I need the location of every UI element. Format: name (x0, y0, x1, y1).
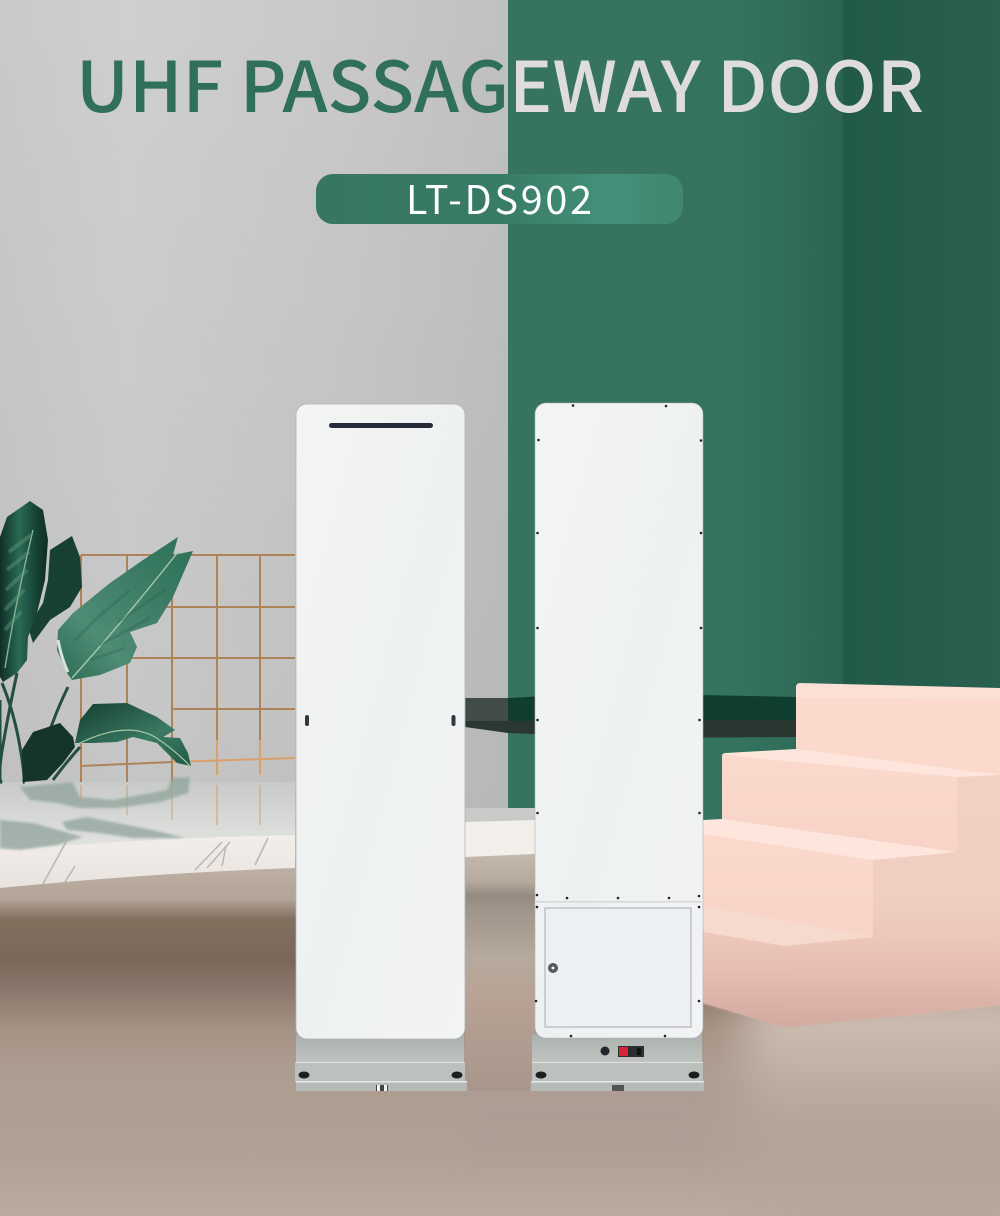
right door unit (531, 403, 704, 1091)
plant (0, 501, 193, 783)
second riser (722, 755, 957, 855)
plant reflection (0, 777, 190, 850)
model pill (316, 169, 683, 226)
left panel (296, 404, 465, 1039)
right side face (957, 775, 1000, 1010)
left base (295, 1035, 467, 1091)
background: dark green wall (843, 0, 1000, 700)
fourth side face (785, 930, 1000, 1027)
fourth step surface (703, 905, 873, 946)
third step surface (703, 819, 957, 860)
right base (531, 1034, 704, 1091)
model number: LT-DS902 (406, 169, 592, 226)
right panel (535, 403, 703, 1038)
fourth riser (703, 930, 785, 1027)
compartment seam (536, 901, 702, 902)
left sensor (305, 715, 309, 726)
third side face (873, 850, 957, 1018)
pill background (316, 174, 683, 224)
background: green wall (508, 0, 843, 860)
floor (0, 850, 1000, 1216)
title: UHF PASSAGEWAY DOOR (76, 32, 924, 133)
stems (0, 673, 80, 783)
marble table, middle (465, 808, 535, 857)
dark table behind doors (465, 693, 797, 738)
top step surface (796, 683, 1000, 699)
left door unit (295, 404, 467, 1091)
leaf: back dark (28, 536, 82, 643)
background: grey wall (0, 0, 508, 890)
status light bar (329, 423, 433, 428)
marble table, left (0, 782, 295, 888)
lower stair mass, softened into floor (703, 905, 1000, 1027)
screws (535, 404, 702, 1037)
compartment door (545, 908, 691, 1027)
gold wall grid (81, 555, 295, 790)
top riser (796, 690, 1000, 780)
leaf: lower dark (22, 723, 75, 782)
leaf: lower (75, 703, 191, 766)
lock (548, 963, 558, 973)
right sensor (452, 715, 456, 726)
pink stairs (703, 683, 1000, 1027)
third riser (703, 832, 873, 940)
leaf: big left (0, 501, 48, 682)
leaf: large light (57, 537, 193, 680)
second step surface (722, 749, 1000, 777)
